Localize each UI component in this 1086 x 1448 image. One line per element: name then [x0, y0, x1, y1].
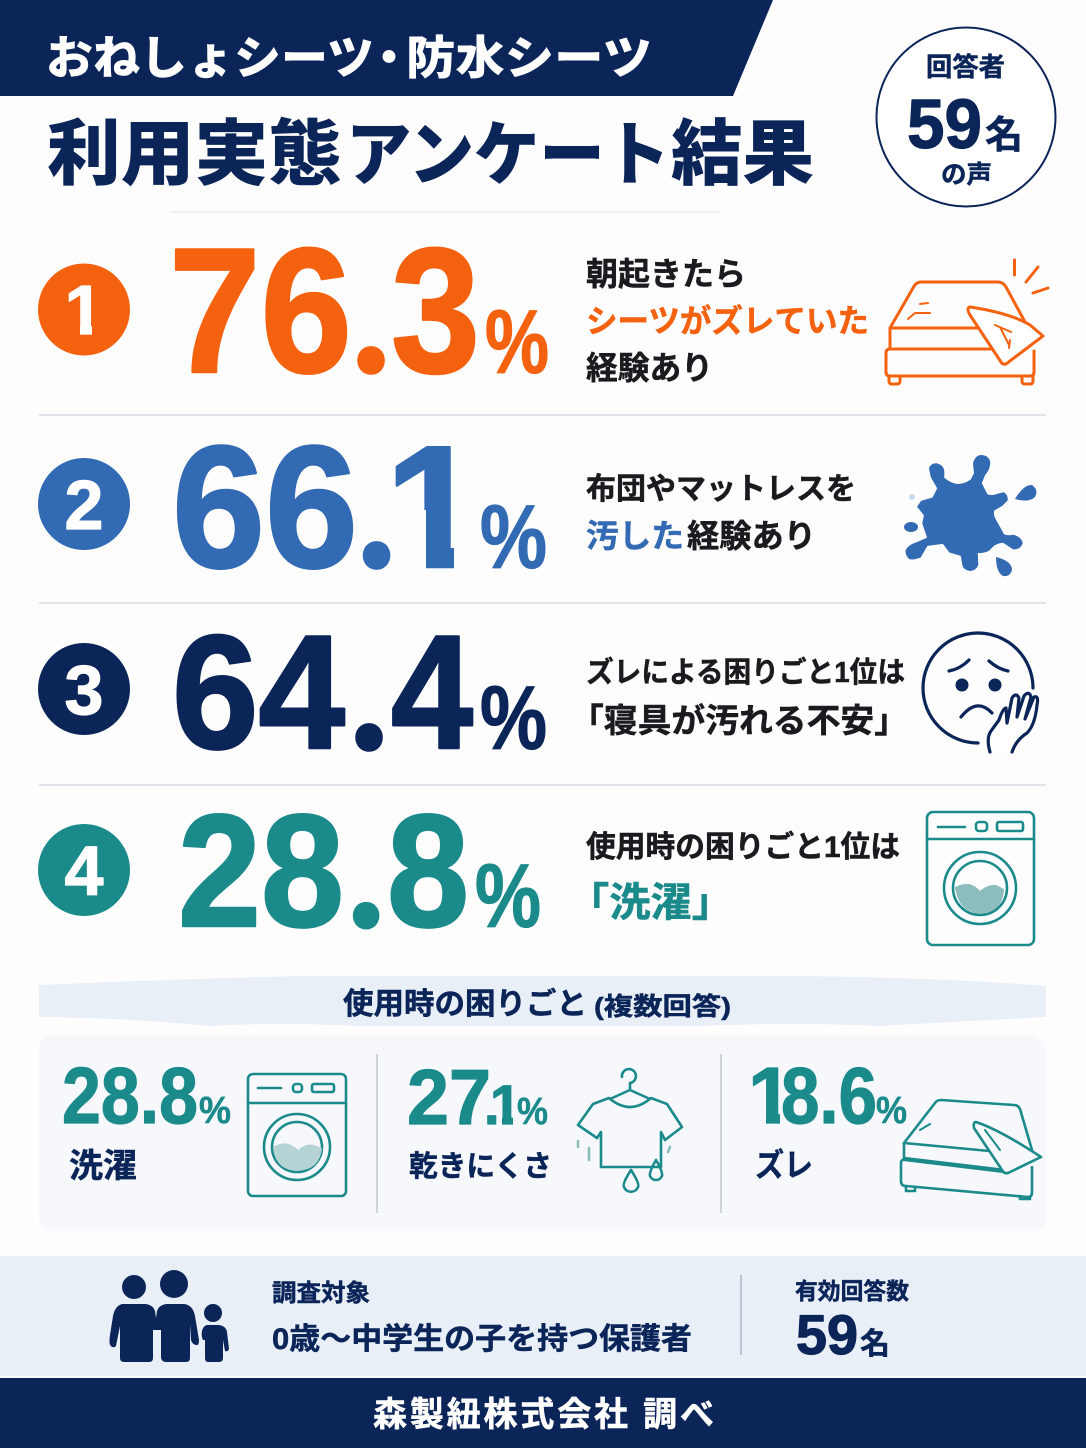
value 76.3%: 76 [169, 211, 352, 410]
value 28.8%: % [475, 847, 541, 947]
value 76.3%: 3 [391, 211, 480, 410]
survey target: 0歳～中学生の子を持つ保護者 [272, 1323, 692, 1356]
description 2: 経験あり [687, 518, 816, 554]
icon: washing machine [927, 812, 1034, 945]
item: shifting [752, 1066, 1042, 1200]
stat row 3 [38, 600, 1038, 788]
description 2: 汚した [586, 518, 684, 554]
value 66.1%: 1 [385, 409, 482, 604]
item: hard to dry: 1 [490, 1073, 521, 1136]
item: hard to dry: 乾きにくさ [409, 1150, 552, 1183]
panel: survey info [0, 1256, 1086, 1376]
value 64.4% [172, 600, 547, 788]
value 66.1%: % [480, 488, 547, 588]
item: hard to dry [407, 1053, 682, 1192]
number badge 3: 3 [65, 651, 103, 729]
section heading band [39, 976, 1046, 1026]
item: shifting: 8.6 [781, 1051, 877, 1140]
value 28.8%: 28 [178, 781, 344, 960]
valid responses value: 名 [860, 1328, 890, 1361]
stat row 2 [38, 444, 1036, 576]
item: laundry: 28.8 [62, 1051, 198, 1140]
description 2: 布団やマットレスを [586, 473, 856, 506]
item: shifting: ズレ [755, 1147, 813, 1183]
stat row 1 [38, 246, 1050, 386]
number badge 4 [38, 824, 130, 916]
number badge 4: 4 [65, 832, 104, 910]
value 28.8%: 8 [387, 781, 469, 960]
description 2 [586, 473, 856, 554]
icon: family [110, 1270, 229, 1362]
item: hard to dry: 27 [407, 1053, 491, 1141]
respondents badge: の声 [941, 161, 992, 189]
value 66.1%: 66 [172, 409, 358, 604]
number badge 2: 2 [65, 466, 103, 544]
icon: shifted sheet on bed [886, 260, 1048, 384]
item: laundry: % [199, 1090, 231, 1132]
item: hard to dry: % [517, 1091, 548, 1133]
number badge 1 [38, 264, 130, 356]
value 66.1% [176, 444, 546, 570]
footer [0, 1378, 1086, 1448]
value 76.3% [169, 211, 549, 411]
value 28.8% [178, 781, 541, 964]
respondents badge: 回答者 [926, 52, 1005, 82]
description 1 [586, 256, 869, 386]
icon: worried face with hand [923, 633, 1038, 752]
header banner [0, 0, 773, 96]
title [47, 95, 814, 200]
banner heading: ・ [366, 22, 412, 88]
title: 結果 [671, 95, 814, 200]
item: laundry: 洗濯 [69, 1147, 137, 1184]
respondents badge: 名 [985, 115, 1023, 157]
description 4: 「洗濯」 [568, 881, 733, 925]
value 76.3%: % [485, 293, 549, 393]
respondents badge: 59 [907, 85, 982, 163]
value 66.1%: . [354, 418, 399, 606]
section heading note: (複数回答) [594, 993, 731, 1021]
banner heading: 防水シーツ [406, 22, 652, 88]
item: hard to dry: . [484, 1073, 500, 1136]
item: laundry [62, 1051, 346, 1196]
value 64.4%: 4 [391, 602, 473, 783]
icon: wet shirt on hanger [578, 1069, 682, 1192]
description 3: ズレによる困りごと1位は [586, 655, 905, 689]
description 4: 使用時の困りごと1位は [586, 830, 900, 864]
section heading: 使用時の困りごと [343, 987, 587, 1021]
banner heading: おねしょシーツ [46, 22, 374, 88]
title: アンケート [346, 99, 670, 200]
number badge 3 [38, 643, 130, 735]
respondents badge [876, 28, 1056, 206]
value 64.4%: % [480, 669, 547, 769]
valid responses value: 59 [796, 1303, 858, 1366]
number badge 2 [38, 458, 130, 550]
value 28.8%: . [344, 783, 388, 964]
banner heading [46, 22, 652, 88]
survey target label: 調査対象 [272, 1280, 370, 1307]
icon: shifted bed small [901, 1100, 1041, 1199]
description 4 [568, 830, 900, 925]
value 64.4%: . [346, 600, 392, 788]
description 1: 経験あり [586, 350, 713, 386]
description 3 [570, 655, 908, 739]
description 1: シーツがズレていた [586, 303, 869, 339]
description 3: 「寝具が汚れる不安」 [570, 702, 908, 739]
footer credit: 森製紐株式会社 調べ [373, 1396, 714, 1434]
description 1: 朝起きたら [586, 256, 746, 292]
valid responses value [796, 1303, 890, 1366]
item: shifting: 1 [748, 1051, 792, 1140]
value 76.3%: . [348, 223, 394, 411]
panel: troubles during use [64, 1054, 1042, 1213]
stat row 4 [38, 781, 1034, 964]
icon: washing machine small [248, 1074, 346, 1196]
number badge 1: 1 [64, 271, 103, 349]
value 64.4%: 64 [172, 602, 345, 783]
title: 利用実態 [47, 95, 342, 200]
icon: stain splash [904, 456, 1036, 576]
valid responses label: 有効回答数 [795, 1278, 909, 1304]
item: shifting: % [876, 1090, 907, 1132]
